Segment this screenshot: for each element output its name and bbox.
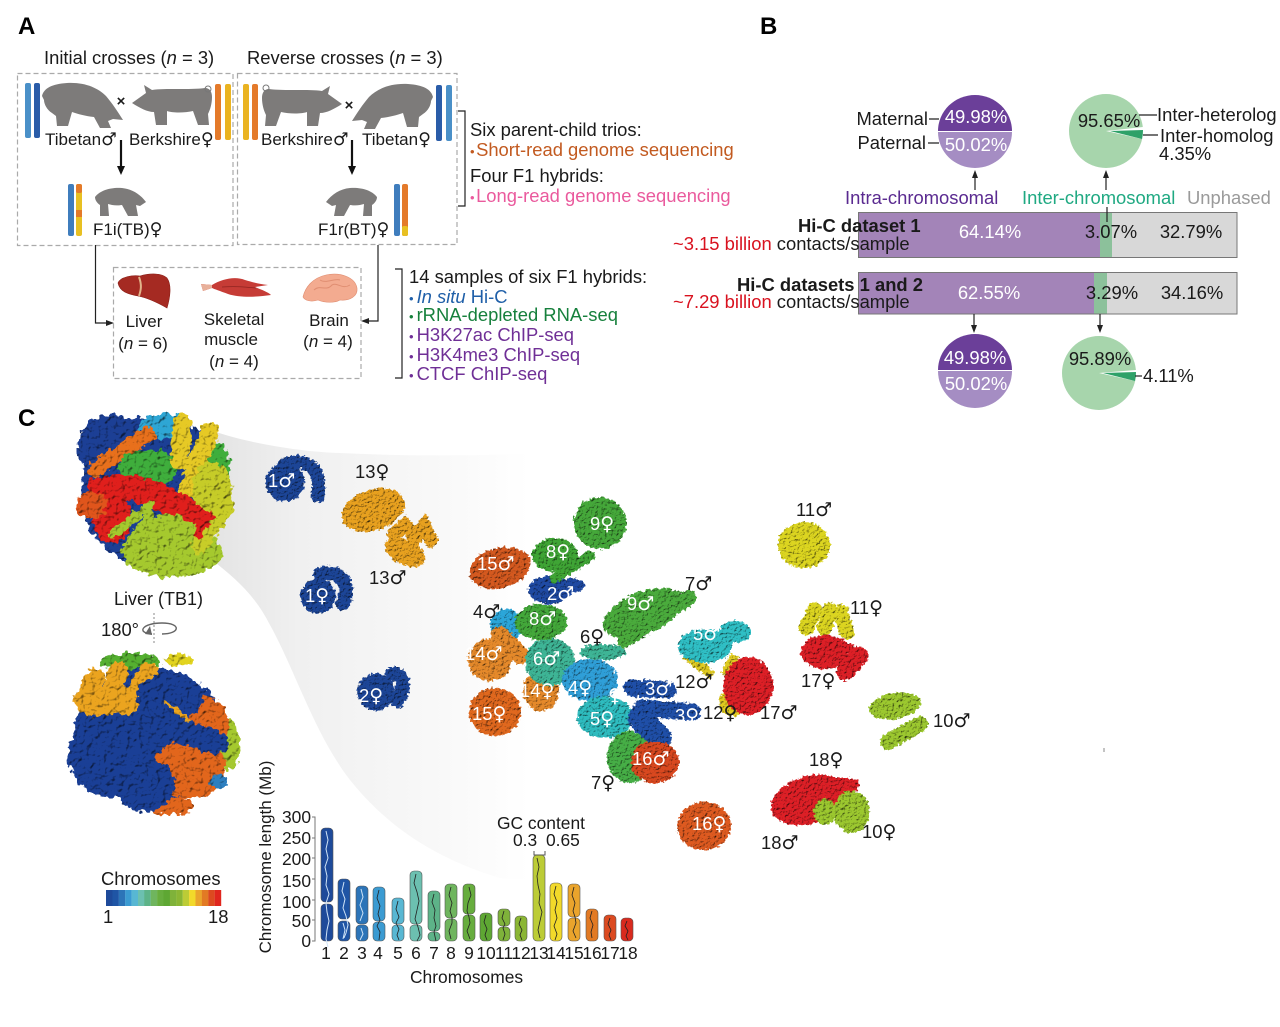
x axis labels: 9 (464, 943, 474, 963)
text: sequencing designs: •Short-read genome sequencing (470, 139, 734, 160)
1 and 2 pairs (266, 462, 403, 710)
panel letter C: C (18, 405, 35, 432)
icon: 180 degree rotation: 180° (101, 619, 139, 640)
black chromosome labels: 4♂ (473, 601, 500, 623)
black chromosome labels: 13♂ (369, 567, 407, 589)
GC content key: 0.3 (513, 830, 537, 850)
icon: F1i pig (95, 188, 146, 216)
stacked bar: datasets 1 and 2: 34.16% (1161, 282, 1223, 303)
white chromosome labels: 16♀ (692, 813, 726, 835)
arrow: intra to upper pie (972, 170, 978, 190)
x axis labels: 14 (546, 943, 566, 963)
icon: Tibetan male pig (42, 83, 123, 128)
label: dataset 1: Hi-C dataset 1 (798, 215, 921, 236)
label: dataset 1: ~3.15 billion contacts/sample (673, 233, 910, 254)
labels: maternal and paternal: Maternal (856, 108, 928, 129)
label: 4.11%: 4.11% (1143, 365, 1194, 386)
black chromosome labels: 12♂ (675, 671, 713, 693)
stacked bar: dataset 1 (858, 207, 1237, 258)
black chromosome labels: 18♀ (809, 749, 843, 771)
x axis labels (321, 943, 638, 963)
x axis labels: 1 (321, 943, 331, 963)
text: sequencing designs: Four F1 hybrids: (470, 165, 604, 186)
GC content key (497, 813, 585, 855)
label: liver: (n = 6) (118, 334, 168, 353)
label: datasets 1 and 2: ~7.29 billion contacts/sample (673, 291, 910, 312)
panel B: Hi-C contacts (673, 13, 1277, 410)
x axis labels: 15 (564, 943, 584, 963)
text: sequencing designs: •Long-read genome sequencing (470, 185, 731, 206)
label: skeletal muscle: (n = 4) (209, 352, 259, 371)
black chromosome labels: 10♀ (862, 821, 896, 843)
box: reverse crosses (238, 74, 457, 244)
y axis: 250 (282, 828, 311, 848)
icon: skeletal muscle (201, 278, 271, 297)
black chromosome labels: 6♀ (580, 626, 604, 648)
label: brain: (n = 4) (303, 332, 353, 351)
text: assays: •CTCF ChIP-seq (409, 363, 547, 384)
labels: maternal and paternal (856, 108, 939, 153)
x axis labels: 2 (339, 943, 349, 963)
13 pair (336, 481, 431, 572)
heading: initial crosses: Initial crosses (n = 3) (44, 47, 214, 68)
black chromosome labels: 11♀ (850, 597, 883, 619)
text: assays: •H3K27ac ChIP-seq (409, 324, 574, 345)
y axis: 150 (282, 871, 311, 891)
GC content key: GC content (497, 813, 585, 833)
pie: inter-chromosomal dataset 1: 95.65% (1078, 110, 1140, 131)
text: assays: •rRNA-depleted RNA-seq (409, 304, 618, 325)
labels: inter-heterolog and inter-homolog (1139, 104, 1277, 164)
white chromosome labels: 15♂ (477, 553, 515, 575)
text: assays: •In situ Hi-C (409, 286, 508, 307)
white chromosome labels: 2♂ (547, 583, 574, 605)
x axis labels: 8 (446, 943, 456, 963)
text: sequencing designs: Six parent-child trios: (470, 119, 642, 140)
white chromosome labels: 3♂ (645, 678, 672, 700)
label: Berkshire male: Berkshire♂ (261, 130, 349, 150)
category labels (845, 187, 1271, 208)
y axis: 0 (301, 931, 311, 951)
label: skeletal muscle: Skeletal (204, 310, 264, 329)
white chromosome labels (268, 470, 726, 835)
bar chart: chromosome length (256, 761, 638, 987)
black chromosome labels: 7♀ (591, 772, 615, 794)
stacked bar: datasets 1 and 2: 62.55% (958, 282, 1020, 303)
stacked bar: datasets 1 and 2 (858, 272, 1237, 314)
labels: inter-heterolog and inter-homolog: 4.35% (1159, 143, 1211, 164)
text: assays (409, 266, 647, 384)
y axis (282, 807, 315, 951)
black chromosome labels: 17♂ (760, 702, 798, 724)
black chromosome labels: 10♂ (933, 710, 971, 732)
white chromosome labels: 16♂ (632, 748, 670, 770)
y axis: 50 (292, 911, 311, 931)
y axis: 200 (282, 849, 311, 869)
white chromosome labels: 1♂ (268, 470, 295, 492)
legend: chromosomes colour scale: Chromosomes (101, 868, 221, 889)
black chromosome labels: 11♂ (796, 499, 832, 521)
GC content lines (325, 831, 628, 947)
icon: Tibetan chromosomes (25, 83, 40, 138)
labels: inter-heterolog and inter-homolog: Inter-homolog (1160, 125, 1273, 146)
label: Tibetan female: Tibetan♀ (362, 130, 431, 150)
cross sign: × (117, 93, 126, 110)
pie: parental intra-chromosomal datasets 1 and 2: 50.02% (945, 373, 1007, 394)
label: Berkshire female: Berkshire♀ (129, 130, 214, 150)
white chromosome labels: 6♂ (533, 648, 560, 670)
white chromosome labels: 5♀ (590, 708, 614, 730)
stacked bar: dataset 1: 3.07% (1085, 221, 1137, 242)
x axis labels: 18 (618, 943, 638, 963)
pie: parental intra-chromosomal datasets 1 and 2: 49.98% (944, 347, 1006, 368)
x axis labels: 16 (582, 943, 602, 963)
black chromosome labels: 18♂ (761, 832, 799, 854)
white chromosome labels: 14♀ (520, 680, 554, 702)
stacked bar: dataset 1: 32.79% (1160, 221, 1222, 242)
labels: inter-heterolog and inter-homolog: Inter-heterolog (1157, 104, 1277, 125)
x axis labels: 3 (357, 943, 367, 963)
sphere: liver genome rotated view (68, 653, 240, 814)
label: skeletal muscle (204, 310, 264, 371)
legend: chromosomes colour scale: 1 (103, 906, 113, 927)
white chromosome labels: 4♀ (568, 677, 592, 699)
x axis labels: 5 (393, 943, 403, 963)
category labels: Inter-chromosomal (1022, 187, 1175, 208)
white chromosome labels: 9♂ (627, 593, 654, 615)
white chromosome labels: 8♀ (546, 541, 570, 563)
label: liver (118, 312, 168, 353)
pie: parental intra-chromosomal dataset 1: 49.98% (945, 106, 1007, 127)
label: dataset 1 (673, 215, 921, 254)
small tick (1103, 748, 1105, 752)
label: brain (303, 311, 353, 351)
label: Tibetan male: Tibetan♂ (45, 130, 117, 150)
arrow: cross to F1r (348, 140, 356, 175)
pie: inter-chromosomal datasets 1 and 2: 95.89% (1069, 348, 1131, 369)
panel C: 3D genome (18, 405, 1104, 987)
cross sign: × (345, 97, 354, 114)
icon: Tibetan female pig (352, 84, 433, 129)
x axis labels: 10 (476, 943, 496, 963)
icon: liver (118, 274, 170, 308)
white chromosome labels: 14♂ (465, 643, 503, 665)
bracket: trios and hybrids (458, 111, 465, 206)
panel letter B: B (760, 13, 777, 40)
box: tissues (114, 268, 361, 378)
stacked bar: dataset 1: 64.14% (959, 221, 1021, 242)
white chromosome labels: 15♀ (472, 703, 506, 725)
arrow: reverse crosses to tissues (361, 245, 378, 324)
x axis labels: 13 (529, 943, 549, 963)
label: liver: Liver (126, 312, 163, 331)
icon: F1i chromosomes (68, 184, 82, 236)
label: datasets 1 and 2: Hi-C datasets 1 and 2 (737, 274, 923, 295)
pie: parental intra-chromosomal dataset 1 (938, 95, 1012, 168)
icon: Berkshire male pig (262, 85, 342, 126)
legend: chromosomes colour scale (101, 868, 228, 927)
x axis labels: 4 (373, 943, 383, 963)
x axis title: Chromosomes (410, 967, 523, 987)
panel A: experimental design (18, 13, 734, 384)
text: sequencing designs (470, 119, 734, 206)
arrow: initial crosses to tissues (96, 245, 114, 326)
icon: F1r pig (326, 188, 377, 216)
heading: reverse crosses: Reverse crosses (n = 3) (247, 47, 443, 68)
pie: inter-chromosomal dataset 1 (1069, 94, 1143, 168)
pie: inter-chromosomal datasets 1 and 2 (1062, 336, 1136, 410)
liver lobe line (139, 277, 141, 296)
white chromosome labels: 1♀ (305, 585, 329, 607)
sphere: liver genome front view (77, 413, 232, 577)
arrow: inter to upper pie (1103, 170, 1109, 190)
white chromosome labels: 2♀ (359, 685, 383, 707)
GC content key: 0.65 (546, 830, 580, 850)
panel letter A: A (18, 13, 35, 40)
text: assays: •H3K4me3 ChIP-seq (409, 344, 580, 365)
label: Liver (TB1): Liver (TB1) (114, 589, 203, 609)
y axis: 300 (282, 807, 311, 827)
central cluster (465, 497, 773, 783)
black chromosome labels (355, 461, 971, 854)
bracket: samples (395, 269, 402, 378)
icon: Berkshire chromosomes (215, 84, 231, 140)
labels: maternal and paternal: Paternal (858, 132, 926, 153)
black chromosome labels: 7♂ (685, 573, 712, 595)
right-side chromosomes (677, 522, 923, 850)
stacked bar: datasets 1 and 2: 3.29% (1086, 282, 1138, 303)
text: assays: 14 samples of six F1 hybrids: (409, 266, 647, 287)
category labels: Unphased (1187, 187, 1271, 208)
black chromosome labels: 13♀ (355, 461, 389, 483)
label: F1r female: F1r(BT)♀ (318, 220, 389, 240)
label: brain: Brain (309, 311, 349, 330)
arrow: cross to F1i (117, 140, 125, 175)
arrow: intra to lower pie (971, 314, 977, 333)
x axis labels: 6 (411, 943, 421, 963)
pie: parental intra-chromosomal dataset 1: 50.02% (945, 134, 1007, 155)
label: datasets 1 and 2 (673, 274, 923, 312)
projection shade (205, 428, 530, 880)
white chromosome labels: 8♂ (529, 608, 556, 630)
pie: parental intra-chromosomal datasets 1 and 2 (938, 334, 1012, 408)
icon: brain (303, 274, 357, 302)
arrow: inter to lower pie (1097, 314, 1103, 333)
icon: Tibetan chromosomes (436, 85, 452, 141)
y axis: 100 (282, 892, 311, 912)
icon: Berkshire chromosomes (243, 84, 258, 140)
chromosome territories (266, 462, 923, 850)
x axis labels: 12 (511, 943, 531, 963)
x axis labels: 7 (429, 943, 439, 963)
label: skeletal muscle: muscle (204, 330, 258, 349)
white chromosome labels: 3♀ (675, 705, 699, 727)
y axis title: Chromosome length (Mb) (256, 761, 275, 953)
icon: Berkshire female pig (132, 85, 212, 125)
icon: F1r chromosomes (394, 184, 408, 236)
label: F1i female: F1i(TB)♀ (93, 220, 162, 240)
box: initial crosses (18, 74, 233, 246)
white chromosome labels: 5♂ (693, 623, 720, 645)
x axis labels: 11 (495, 943, 513, 963)
x axis labels: 17 (600, 943, 620, 963)
category labels: Intra-chromosomal (845, 187, 998, 208)
bars (321, 828, 633, 941)
white chromosome labels: 9♀ (590, 513, 614, 535)
icon: 180 degree rotation (101, 613, 176, 643)
white chromosome labels: ♀ (608, 685, 622, 707)
black chromosome labels: 17♀ (801, 670, 835, 692)
legend: chromosomes colour scale: 18 (208, 906, 228, 927)
black chromosome labels: 12♀ (703, 702, 737, 724)
